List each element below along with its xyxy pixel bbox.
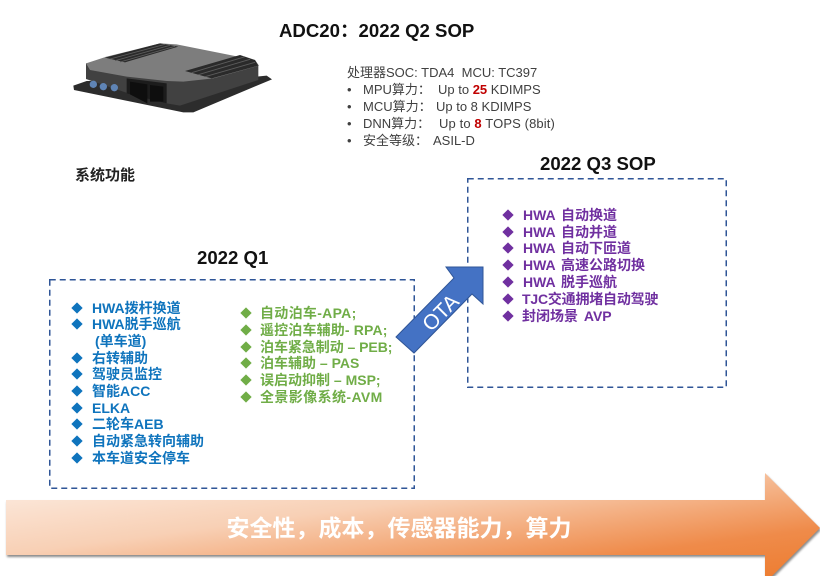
list: green parking features xyxy=(240,305,392,405)
heading: 2022 Q1: 2022 Q1 xyxy=(197,247,268,268)
text block: processor specs: Up to 8 KDIMPS xyxy=(436,99,531,114)
text block: processor specs: 安全等级： xyxy=(363,133,428,148)
arrow: OTA: OTA xyxy=(418,290,464,336)
heading: 2022 Q3 SOP: 2022 Q3 SOP xyxy=(540,153,656,174)
panel: 2022 Q3 SOP functions: 封闭场景 AVP xyxy=(522,308,612,324)
text block: processor specs: • xyxy=(347,133,352,148)
panel: 2022 Q1 functions xyxy=(49,279,415,489)
list: blue driving features: 右转辅助 xyxy=(92,350,148,366)
list: green parking features: 泊车紧急制动 – PEB; xyxy=(260,339,392,355)
list: blue driving features: (单车道) xyxy=(95,333,146,349)
list: blue driving features: HWA脱手巡航 xyxy=(92,316,181,332)
text block: processor specs: DNN算力： xyxy=(363,116,430,131)
list: blue driving features: 本车道安全停车 xyxy=(92,450,190,466)
panel: 2022 Q3 SOP functions: TJC交通拥堵自动驾驶 xyxy=(522,291,658,307)
panel: 2022 Q3 SOP functions xyxy=(467,178,727,388)
text block: processor specs: • xyxy=(347,99,352,114)
list: blue driving features: 智能ACC xyxy=(92,383,150,399)
text block: processor specs: • xyxy=(347,116,352,131)
icon: ADC20 controller device xyxy=(73,43,272,112)
panel: 2022 Q3 SOP functions: HWA 自动并道 xyxy=(523,224,617,240)
heading: system functions: 系统功能 xyxy=(75,167,135,184)
list: green parking features: 遥控泊车辅助- RPA; xyxy=(260,322,388,338)
text block: processor specs xyxy=(347,65,555,148)
list: blue driving features: 自动紧急转向辅助 xyxy=(92,433,204,449)
text block: processor specs: MPU算力： xyxy=(363,82,431,97)
text block: processor specs: MCU算力： xyxy=(363,99,432,114)
panel: 2022 Q3 SOP functions: HWA 自动下匝道 xyxy=(523,240,631,256)
arrow: safety, cost, sensor capability, compute: 安全性，成本，传感器能力，算力 xyxy=(226,515,572,541)
text block: processor specs: ASIL-D xyxy=(433,133,475,148)
title: ADC20：2022 Q2 SOP xyxy=(279,20,474,41)
list: green parking features: 自动泊车-APA; xyxy=(260,305,357,321)
panel: 2022 Q3 SOP functions: HWA 脱手巡航 xyxy=(523,274,617,290)
list: blue driving features: HWA拨杆换道 xyxy=(92,300,181,316)
text block: processor specs: 处理器SOC: TDA4 MCU: TC397 xyxy=(347,65,537,80)
text block: processor specs: • xyxy=(347,82,352,97)
panel: 2022 Q3 SOP functions: HWA 高速公路切换 xyxy=(523,257,645,273)
list: green parking features: 全景影像系统-AVM xyxy=(260,389,383,405)
list: green parking features: 泊车辅助 – PAS xyxy=(260,355,359,371)
list: blue driving features: 驾驶员监控 xyxy=(92,366,162,382)
list: blue driving features: ELKA xyxy=(92,400,130,416)
list: blue driving features: 二轮车AEB xyxy=(92,416,164,432)
list: blue driving features xyxy=(71,300,204,466)
list: green parking features: 误启动抑制 – MSP; xyxy=(260,372,381,388)
panel: 2022 Q3 SOP functions: HWA 自动换道 xyxy=(523,207,617,223)
text block: processor specs: Up to 8 TOPS (8bit) xyxy=(439,116,555,131)
text block: processor specs: Up to 25 KDIMPS xyxy=(438,82,541,97)
